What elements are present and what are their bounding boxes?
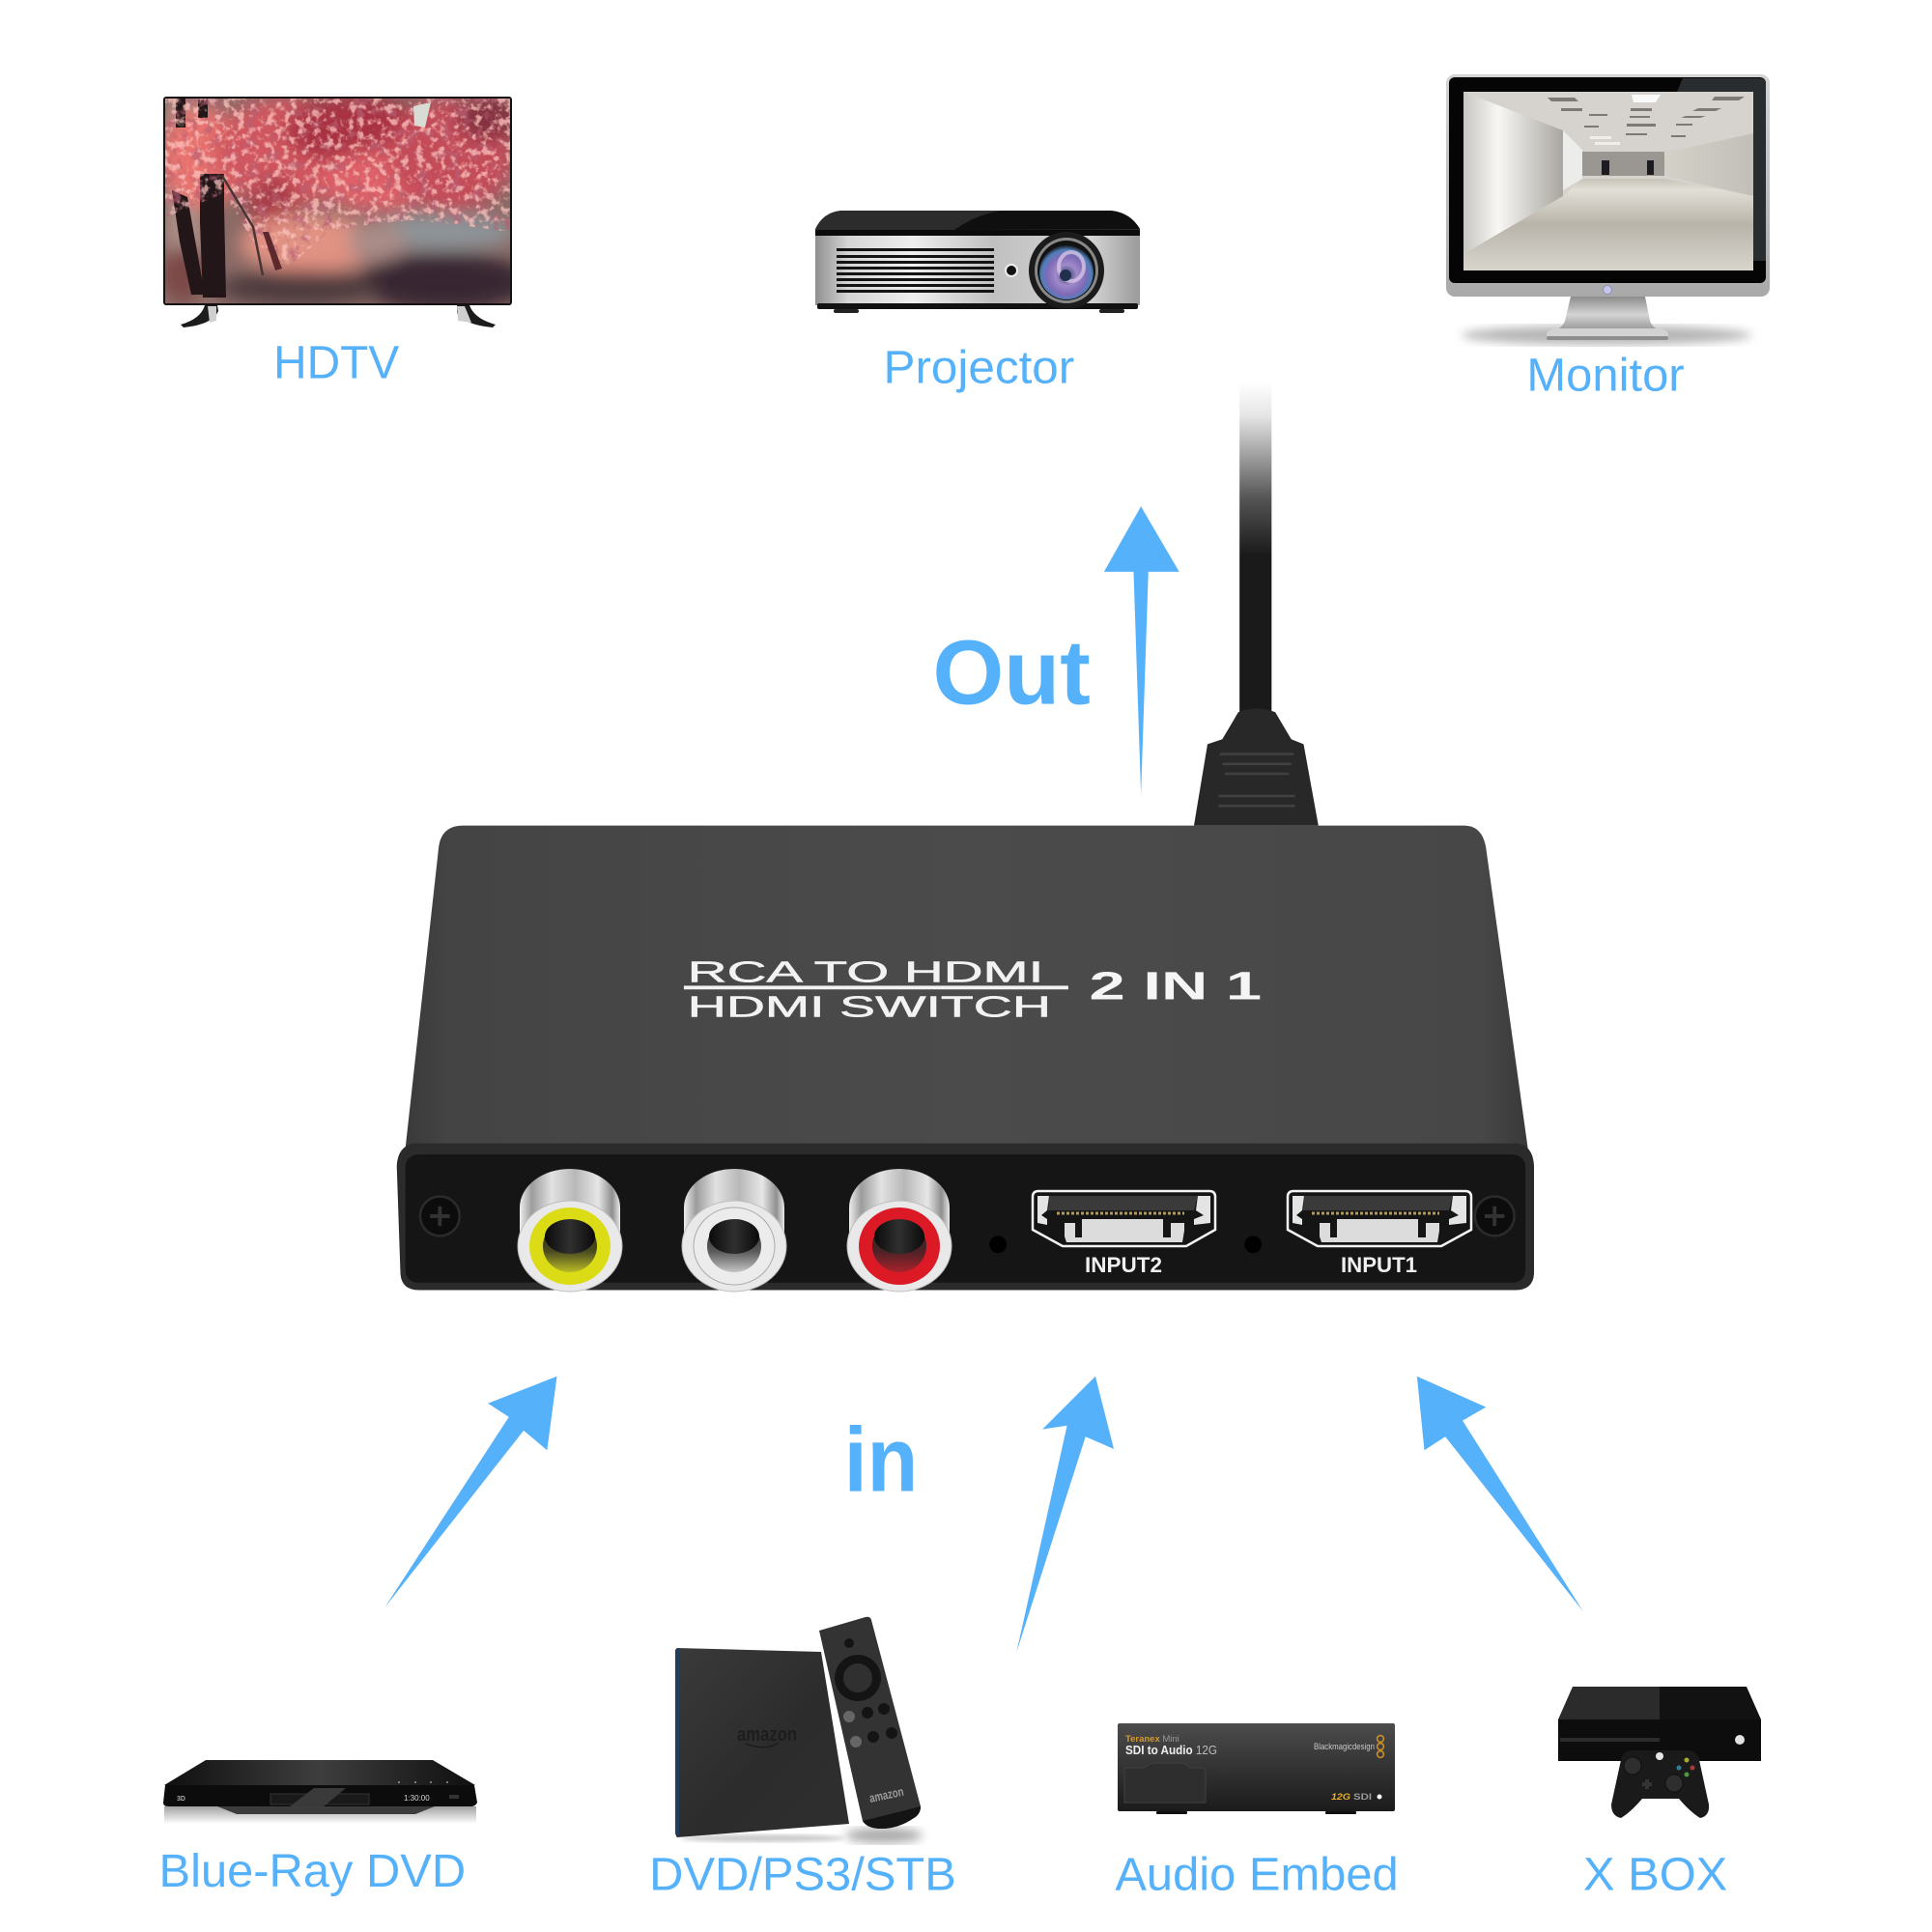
- remote buttons: [843, 1638, 897, 1747]
- HDMI port: INPUT2: [1033, 1191, 1215, 1246]
- HDMI cable: [1194, 382, 1319, 826]
- icon: audio embedder: SDI: [1353, 1792, 1372, 1802]
- arrows and labels (lower section): [159, 1377, 1727, 1901]
- device print: HDMI SWITCH: HDMI SWITCH: [688, 990, 1051, 1023]
- device top plate: [406, 826, 1528, 1149]
- player body: [163, 1785, 477, 1806]
- icon: audio embedder: Blackmagicdesign: [1314, 1742, 1375, 1752]
- embedder text: Teranex Mini: [1125, 1734, 1179, 1745]
- projector vents: [837, 248, 994, 293]
- remote logo: amazon: [868, 1784, 905, 1805]
- HDMI port: INPUT1: [1288, 1191, 1471, 1246]
- monitor stand: [1557, 297, 1658, 329]
- label: Out: Out: [933, 622, 1091, 724]
- remote: [819, 1617, 921, 1829]
- label: Monitor: Monitor: [1526, 349, 1685, 401]
- TV legs: [181, 305, 496, 327]
- label: INPUT1: INPUT1: [1341, 1253, 1417, 1277]
- RCA jack: white: [682, 1169, 786, 1292]
- label: DVD/PS3/STB: DVD/PS3/STB: [649, 1849, 956, 1901]
- arrow: out: [1104, 506, 1179, 795]
- projector feet: [834, 309, 1124, 313]
- label: Audio Embed: Audio Embed: [1115, 1849, 1399, 1901]
- indicator dots: [989, 1236, 1262, 1253]
- monitor screen: corridor: [1463, 92, 1753, 270]
- icon: Xbox console and controller: [1558, 1687, 1761, 1818]
- controller sticks and buttons: [1624, 1752, 1694, 1792]
- embedder feet: [1156, 1811, 1356, 1814]
- TV tree trunks: [172, 97, 226, 298]
- embedder body: [1118, 1723, 1395, 1811]
- projector top: [815, 211, 1140, 236]
- icon: Amazon box and remote: [675, 1617, 923, 1843]
- icon: audio embedder: SDI to Audio 12G: [1125, 1744, 1217, 1757]
- icon: audio embedder: [1118, 1723, 1395, 1814]
- RCA to HDMI device: [397, 826, 1534, 1290]
- screw right: [1475, 1197, 1515, 1236]
- icon: projector: [815, 211, 1140, 313]
- arrow: in from DVD/PS3/STB: [1016, 1377, 1114, 1652]
- label: Blue-Ray DVD: Blue-Ray DVD: [159, 1845, 466, 1897]
- box shadow: [845, 1828, 923, 1843]
- TV screen: red autumn forest: [165, 99, 510, 303]
- icon: Blu-ray DVD player: [163, 1760, 477, 1824]
- player top: [164, 1760, 475, 1785]
- arrow: in from Audio Embed / X BOX: [1417, 1377, 1583, 1611]
- device front panel: [406, 1154, 1525, 1283]
- amazon logo: amazon: [737, 1724, 797, 1746]
- screw left: [420, 1197, 460, 1236]
- device print: 2 IN 1: 2 IN 1: [1090, 963, 1262, 1008]
- embedder port panel: [1124, 1763, 1206, 1803]
- label: HDTV: HDTV: [273, 337, 400, 389]
- monitor frame: [1446, 74, 1770, 297]
- cable: [1239, 382, 1271, 715]
- arrow: in from Blu-ray: [384, 1377, 557, 1608]
- device print: RCA TO HDMI: RCA TO HDMI: [688, 956, 1043, 989]
- player display: 1:30:00: [404, 1794, 430, 1803]
- label: Projector: Projector: [884, 342, 1074, 394]
- player tray: [270, 1794, 369, 1804]
- label: INPUT2: INPUT2: [1085, 1253, 1162, 1277]
- console top: [1558, 1687, 1660, 1719]
- controller: [1611, 1750, 1709, 1818]
- remote ring button: [835, 1655, 881, 1701]
- TV frame: [163, 97, 512, 305]
- console body: [1558, 1719, 1761, 1761]
- monitor shadow: [1462, 326, 1751, 345]
- device front shell: [397, 1144, 1534, 1290]
- HDMI connector: [1194, 708, 1319, 826]
- icon: audio embedder: 12G: [1331, 1792, 1351, 1803]
- RCA jack: red: [847, 1169, 952, 1292]
- amazon box: [675, 1648, 849, 1837]
- label: X BOX: X BOX: [1583, 1849, 1727, 1901]
- projector lens: [1029, 232, 1104, 309]
- icon: monitor: [1446, 74, 1770, 345]
- projector body: [815, 235, 1140, 305]
- icon: HDTV: [159, 95, 531, 327]
- icon: Blu-ray DVD player: 3D: [177, 1796, 185, 1803]
- RCA jack: yellow: [518, 1169, 622, 1292]
- label: in: in: [844, 1409, 918, 1511]
- cable and arrows and labels (upper section): [273, 337, 1685, 1290]
- player shadow: [164, 1806, 476, 1824]
